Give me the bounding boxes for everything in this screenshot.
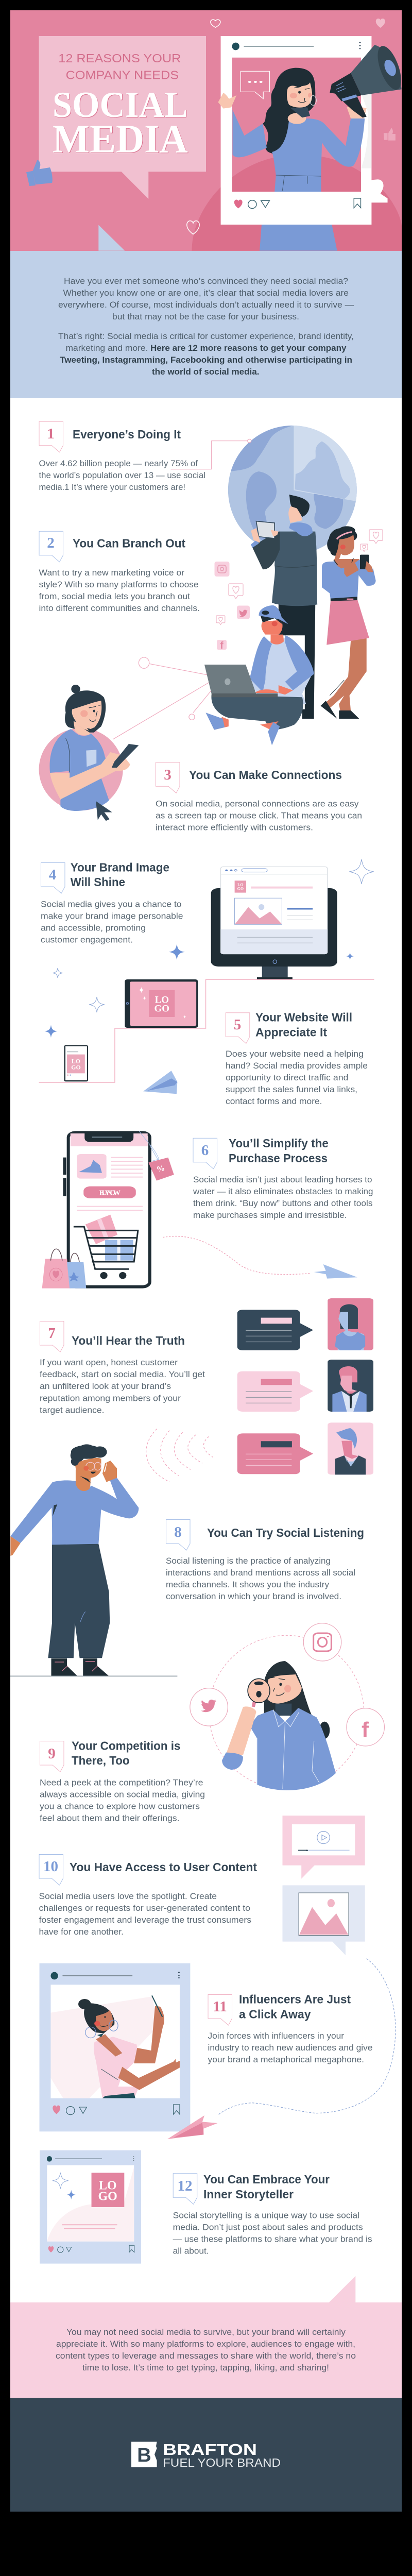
post action icons: [53, 2105, 180, 2115]
number badge 8: [166, 1520, 190, 1550]
background arc: [192, 180, 402, 250]
icon: paper plane small: [314, 1264, 357, 1279]
social icon tiles: [214, 562, 250, 651]
number badge 5: 5: [234, 1016, 241, 1033]
hero speech bubble: [39, 36, 206, 199]
facebook circle: [347, 1708, 384, 1746]
body 11: industry to reach new audiences and give: [208, 2043, 373, 2053]
section 12: storyteller: [173, 2173, 372, 2256]
illustration: brand post: LO: [99, 2179, 117, 2192]
post action icons: [234, 198, 361, 209]
illustration: influencer post: [40, 1963, 190, 2131]
body 3: [156, 800, 362, 833]
number badge 9: [40, 1741, 64, 1772]
body 2: style? With so many platforms to choose: [39, 580, 199, 589]
icon: heart bubble large: [369, 530, 383, 544]
illustration: feedback rows: [237, 1298, 373, 1475]
heading 11: Influencers Are Just: [239, 1993, 351, 2006]
body 2: from, social media lets you branch out: [39, 592, 190, 601]
icon: small heart bubble: [216, 616, 225, 624]
number badge 6: 6: [201, 1142, 209, 1159]
dashed flight path: [163, 1236, 310, 1275]
hero title: COMPANY NEEDS: [66, 68, 179, 81]
illustration: boy with laptop: [204, 605, 314, 745]
illustration: shopping phone: BUY NOW: [99, 1189, 121, 1197]
speech bubble icon: [241, 71, 269, 99]
illustration: video bubble: [282, 1816, 365, 1879]
instagram circle: [303, 1623, 341, 1661]
icon: thumbs up blue: [26, 160, 53, 186]
icon: twitter: [201, 1700, 216, 1712]
section 6: simplify purchase: [193, 1137, 373, 1220]
feedback row 3: [237, 1422, 373, 1475]
heading 5: Your Website Will: [255, 1011, 352, 1024]
body 5: support the sales funnel via links,: [226, 1085, 357, 1094]
body 8: conversation in which your brand is involved.: [166, 1592, 341, 1601]
section 8: social listening: [166, 1520, 364, 1601]
post action icons: [48, 2245, 134, 2252]
illustration: shopping phone: [42, 1131, 357, 1289]
heading 8: You Can Try Social Listening: [207, 1526, 364, 1539]
gift boxes: [85, 1215, 133, 1261]
body 12: all about.: [173, 2246, 209, 2256]
social post frame: [221, 36, 371, 225]
body 4: make your brand image personable: [41, 912, 183, 921]
heading 12: Inner Storyteller: [203, 2188, 294, 2201]
hero title: MEDIA: [53, 116, 188, 161]
icon: thumbs up pink: [384, 128, 396, 141]
illustration: woman with phone: [320, 526, 376, 719]
man's shoes and ground: [10, 1658, 177, 1676]
intro text: Tweeting, Instagramming, Facebooking and otherwise participating in: [60, 355, 352, 365]
dashed flight path blue: [218, 1959, 396, 2115]
heading 1: Everyone’s Doing It: [73, 428, 181, 441]
number badge 10: [39, 1855, 63, 1885]
body 1: [39, 459, 205, 492]
illustration: tablet with logo: LO: [155, 995, 169, 1006]
hero illustration: [26, 19, 406, 251]
body 4: [41, 900, 183, 945]
heading 3: You Can Make Connections: [189, 768, 342, 782]
body 4: Social media gives you a chance to: [41, 900, 181, 909]
heading 2: You Can Branch Out: [73, 536, 185, 550]
body 9: always accessible on social media, giving: [40, 1790, 205, 1799]
icon: paper plane pink: [167, 2115, 217, 2139]
number badge 7: [40, 1321, 64, 1352]
body 7: target audience.: [40, 1405, 104, 1415]
illustration: phone with logo: GO: [71, 1063, 81, 1071]
illustration: network lines: [113, 657, 213, 739]
number badge 1: 1: [47, 426, 55, 442]
feedback row 2: [237, 1360, 373, 1412]
panel: closing background: [10, 2302, 402, 2398]
number badge 3: 3: [164, 767, 171, 783]
body 5: Does your website need a helping: [226, 1049, 364, 1059]
heading 11: [239, 1993, 351, 2021]
panel: intro background: [10, 251, 402, 398]
hero title: [53, 52, 188, 161]
body 12: Social storytelling is a unique way to use social: [173, 2211, 359, 2221]
number badge 4: 4: [49, 867, 56, 883]
body 9: feel about them and their offerings.: [40, 1814, 179, 1823]
icon: filled heart: [376, 19, 385, 28]
body 6: make purchases simple and irresistible.: [193, 1211, 347, 1220]
body 3: On social media, personal connections are as easy: [156, 800, 359, 809]
globe: [224, 424, 357, 554]
body 1: media.1 It’s where your customers are!: [39, 483, 185, 492]
icon: outline heart bottom: [187, 221, 199, 234]
illustration: man on phone: [10, 1444, 139, 1658]
body 6: them drink. “Buy now” buttons and other tools: [193, 1199, 373, 1208]
body 9: [40, 1778, 205, 1823]
heading 12: You Can Embrace Your: [203, 2173, 330, 2186]
section 1: everyone's doing it: [39, 421, 205, 492]
intro text: but that may not be the case for your business.: [112, 312, 299, 321]
body 7: [40, 1358, 205, 1415]
body 2: [39, 568, 200, 613]
intro text: the world of social media.: [152, 367, 260, 377]
intro text: marketing and more.: [66, 343, 148, 353]
closing text: time to lose. It’s time to get typing, tapping, liking, and sharing!: [82, 2363, 329, 2372]
panel: hero background: [10, 10, 402, 251]
section 11: influencers: [208, 1993, 373, 2064]
section 9: competition: [40, 1739, 205, 1823]
shirt below frame: [260, 223, 337, 251]
number badge 2: 2: [47, 535, 55, 551]
logo tagline: FUEL YOUR BRAND: [163, 2456, 281, 2469]
icon: heart bubble: [229, 584, 243, 599]
icon: cursor: [96, 801, 112, 821]
shopping bags: [42, 1249, 86, 1289]
shopping cart: [74, 1227, 138, 1269]
intro text: everywhere. Of course, most individuals don’t actually need it to survive —: [58, 300, 354, 310]
illustration: phone with logo: [64, 1045, 88, 1081]
body 1: Over 4.62 billion people — nearly 75% of: [39, 459, 198, 468]
section 3: make connections: [156, 762, 362, 833]
frame shadow: [361, 93, 371, 168]
post header: [47, 2156, 134, 2162]
body 4: and accessible, promoting: [41, 923, 146, 933]
body 9: Need a peek at the competition? They’re: [40, 1778, 203, 1788]
number badge 2: [39, 531, 63, 562]
body 8: Social listening is the practice of analyzing: [166, 1556, 331, 1566]
section 5: website: [226, 1011, 368, 1106]
illustration: man with phone: [39, 685, 139, 821]
heading 4: Will Shine: [71, 875, 125, 889]
illustration: monitor with website: [211, 867, 337, 979]
sale tag: [148, 1158, 174, 1181]
body 11: your brand a metaphorical megaphone.: [208, 2055, 364, 2064]
section 2: you can branch out: [39, 531, 200, 613]
heading 5: Appreciate It: [255, 1026, 327, 1039]
icon: outline heart top: [211, 20, 220, 27]
icon: instagram tile: [214, 562, 230, 577]
icon: person white: [371, 179, 388, 203]
icon: twitter tile: [237, 606, 250, 619]
illustration: monitor with website: LO: [237, 883, 244, 887]
number badge 5: [226, 1013, 250, 1043]
icon: facebook tile: f: [220, 640, 224, 651]
number badge 8: 8: [174, 1524, 182, 1540]
panel: white content background: [10, 398, 402, 2304]
number badge 3: [156, 762, 180, 793]
panel: footer background: [10, 2398, 402, 2512]
section 7: hear the truth: [40, 1321, 205, 1415]
body 2: Want to try a new marketing voice or: [39, 568, 185, 578]
intro text: That’s right: Social media is critical for customer experience, brand identity,: [58, 331, 354, 341]
post avatar and name line: [232, 42, 361, 50]
icon: paper plane blue: [143, 1071, 177, 1094]
illustration: image bubble: [282, 1885, 365, 1955]
number badge 11: [208, 1995, 232, 2025]
body 10: foster engagement and leverage the trust consumers: [39, 1916, 251, 1925]
body 10: challenges or requests for user-generated content to: [39, 1904, 250, 1913]
body 5: [226, 1049, 368, 1106]
body 8: [166, 1556, 355, 1601]
body 8: media channels. It shows you the industry: [166, 1580, 330, 1589]
intro text: Here are 12 more reasons to get your company: [150, 343, 347, 353]
heading 9: There, Too: [72, 1754, 130, 1767]
icon: facebook: f: [362, 1718, 369, 1742]
sparkles: [44, 859, 374, 1038]
body 6: Social media isn’t just about leading horses to: [193, 1175, 372, 1184]
heading 7: You’ll Hear the Truth: [72, 1334, 185, 1347]
illustration: sound waves: [146, 1429, 213, 1482]
body 8: interactions and brand mentions across all social: [166, 1568, 355, 1578]
megaphone: [330, 45, 406, 117]
body 3: interact more efficiently with customers.: [156, 823, 313, 833]
sale tag: %: [156, 1164, 166, 1174]
heading 12: [203, 2173, 330, 2201]
heading 6: You’ll Simplify the: [229, 1137, 329, 1150]
heading 9: Your Competition is: [72, 1739, 180, 1753]
illustration: brand post: [40, 2150, 141, 2264]
intro text: [58, 276, 354, 377]
body 11: Join forces with influencers in your: [208, 2031, 345, 2041]
section 10: user content: [39, 1855, 257, 1937]
body 7: reputation among members of your: [40, 1394, 181, 1403]
body 4: customer engagement.: [41, 936, 133, 945]
body 12: — use these platforms to share what your brand is: [173, 2235, 372, 2244]
logo: Brafton: [131, 2441, 281, 2469]
number badge 6: [193, 1138, 217, 1169]
section 4: brand image: [41, 861, 183, 945]
body 6: [193, 1175, 373, 1220]
post image: [232, 58, 361, 192]
illustration: brand post: GO: [98, 2190, 117, 2203]
closing text: content types to leverage and messages to share with the world, there’s no: [56, 2351, 356, 2361]
illustration: phone with logo: LO: [72, 1057, 80, 1064]
body 10: have for one another.: [39, 1927, 124, 1937]
heading 6: Purchase Process: [229, 1151, 328, 1165]
hero title: 12 REASONS YOUR: [58, 52, 181, 65]
body 5: contact forms and more.: [226, 1097, 322, 1106]
body 12: [173, 2211, 372, 2256]
body 1: the world’s population over 13 — use social: [39, 471, 205, 480]
intro bubble tail: [98, 225, 125, 251]
body 5: opportunity to direct traffic and: [226, 1073, 348, 1082]
body 10: [39, 1892, 251, 1937]
body 12: media. Don’t just post about sales and products: [173, 2223, 363, 2232]
illustration: tablet with logo: GO: [154, 1003, 169, 1014]
number badge 12: 12: [177, 2178, 193, 2194]
heading 4: [71, 861, 169, 889]
heading 11: a Click Away: [239, 2008, 311, 2021]
heading 9: [72, 1739, 180, 1767]
logo mark: [131, 2442, 157, 2467]
number badge 7: 7: [48, 1325, 56, 1342]
number badge 4: [41, 862, 65, 893]
heading 4: Your Brand Image: [71, 861, 169, 874]
illustration: monitor with website: GO: [237, 886, 244, 891]
number badge 10: 10: [43, 1858, 58, 1875]
step line under devices: [39, 979, 374, 1082]
logo wordmark: BRAFTON: [163, 2441, 257, 2459]
number badge 11: 11: [213, 1998, 227, 2015]
body 5: hand? Social media provides ample: [226, 1061, 368, 1071]
heading 5: [255, 1011, 352, 1039]
intro text: Have you ever met someone who’s convinced they need social media?: [64, 276, 348, 286]
heading 6: [229, 1137, 329, 1165]
twitter circle: [190, 1688, 228, 1726]
number badge 12: [173, 2174, 197, 2204]
connector line to 75%: [171, 439, 251, 469]
number badge 1: [39, 421, 63, 452]
body 10: Social media users love the spotlight. Create: [39, 1892, 217, 1901]
hero title: SOCIAL: [53, 85, 188, 125]
illustration: tablet with logo: [125, 979, 198, 1028]
closing text: You may not need social media to survive, but your brand will certainly: [66, 2327, 346, 2337]
closing text: appreciate it. With so many platforms to explore, audiences to engage with,: [56, 2339, 355, 2349]
body 11: [208, 2031, 373, 2064]
body 6: water — it also eliminates obstacles to making: [193, 1187, 373, 1196]
intro text: Whether you know one or are one, it’s clear that social media lovers are: [63, 288, 349, 298]
heading 10: You Have Access to User Content: [70, 1860, 257, 1874]
body 7: If you want open, honest customer: [40, 1358, 178, 1367]
number badge 9: 9: [48, 1745, 56, 1762]
selfie woman: [50, 1995, 180, 2098]
body 7: feedback, start on social media. You’ll get: [40, 1370, 205, 1379]
woman with megaphone: [218, 68, 367, 192]
closing bubble tail: [329, 2276, 355, 2303]
icon: facebook tile: [217, 640, 227, 651]
illustration: man with tablet: [251, 495, 317, 719]
body 7: an unfiltered look at your brand’s: [40, 1382, 171, 1391]
illustration: woman with magnifying glass: [190, 1623, 384, 1790]
feedback row 1: [237, 1298, 373, 1350]
body 9: you a chance to explore how customers: [40, 1802, 200, 1811]
post header: [50, 1972, 180, 1979]
icon: heart bubble small: [360, 544, 368, 551]
body 3: as a screen tap or mouse click. That means you can: [156, 811, 362, 820]
logo mark: B: [137, 2445, 151, 2466]
body 2: into different communities and channels.: [39, 604, 200, 613]
closing text: [56, 2327, 356, 2372]
